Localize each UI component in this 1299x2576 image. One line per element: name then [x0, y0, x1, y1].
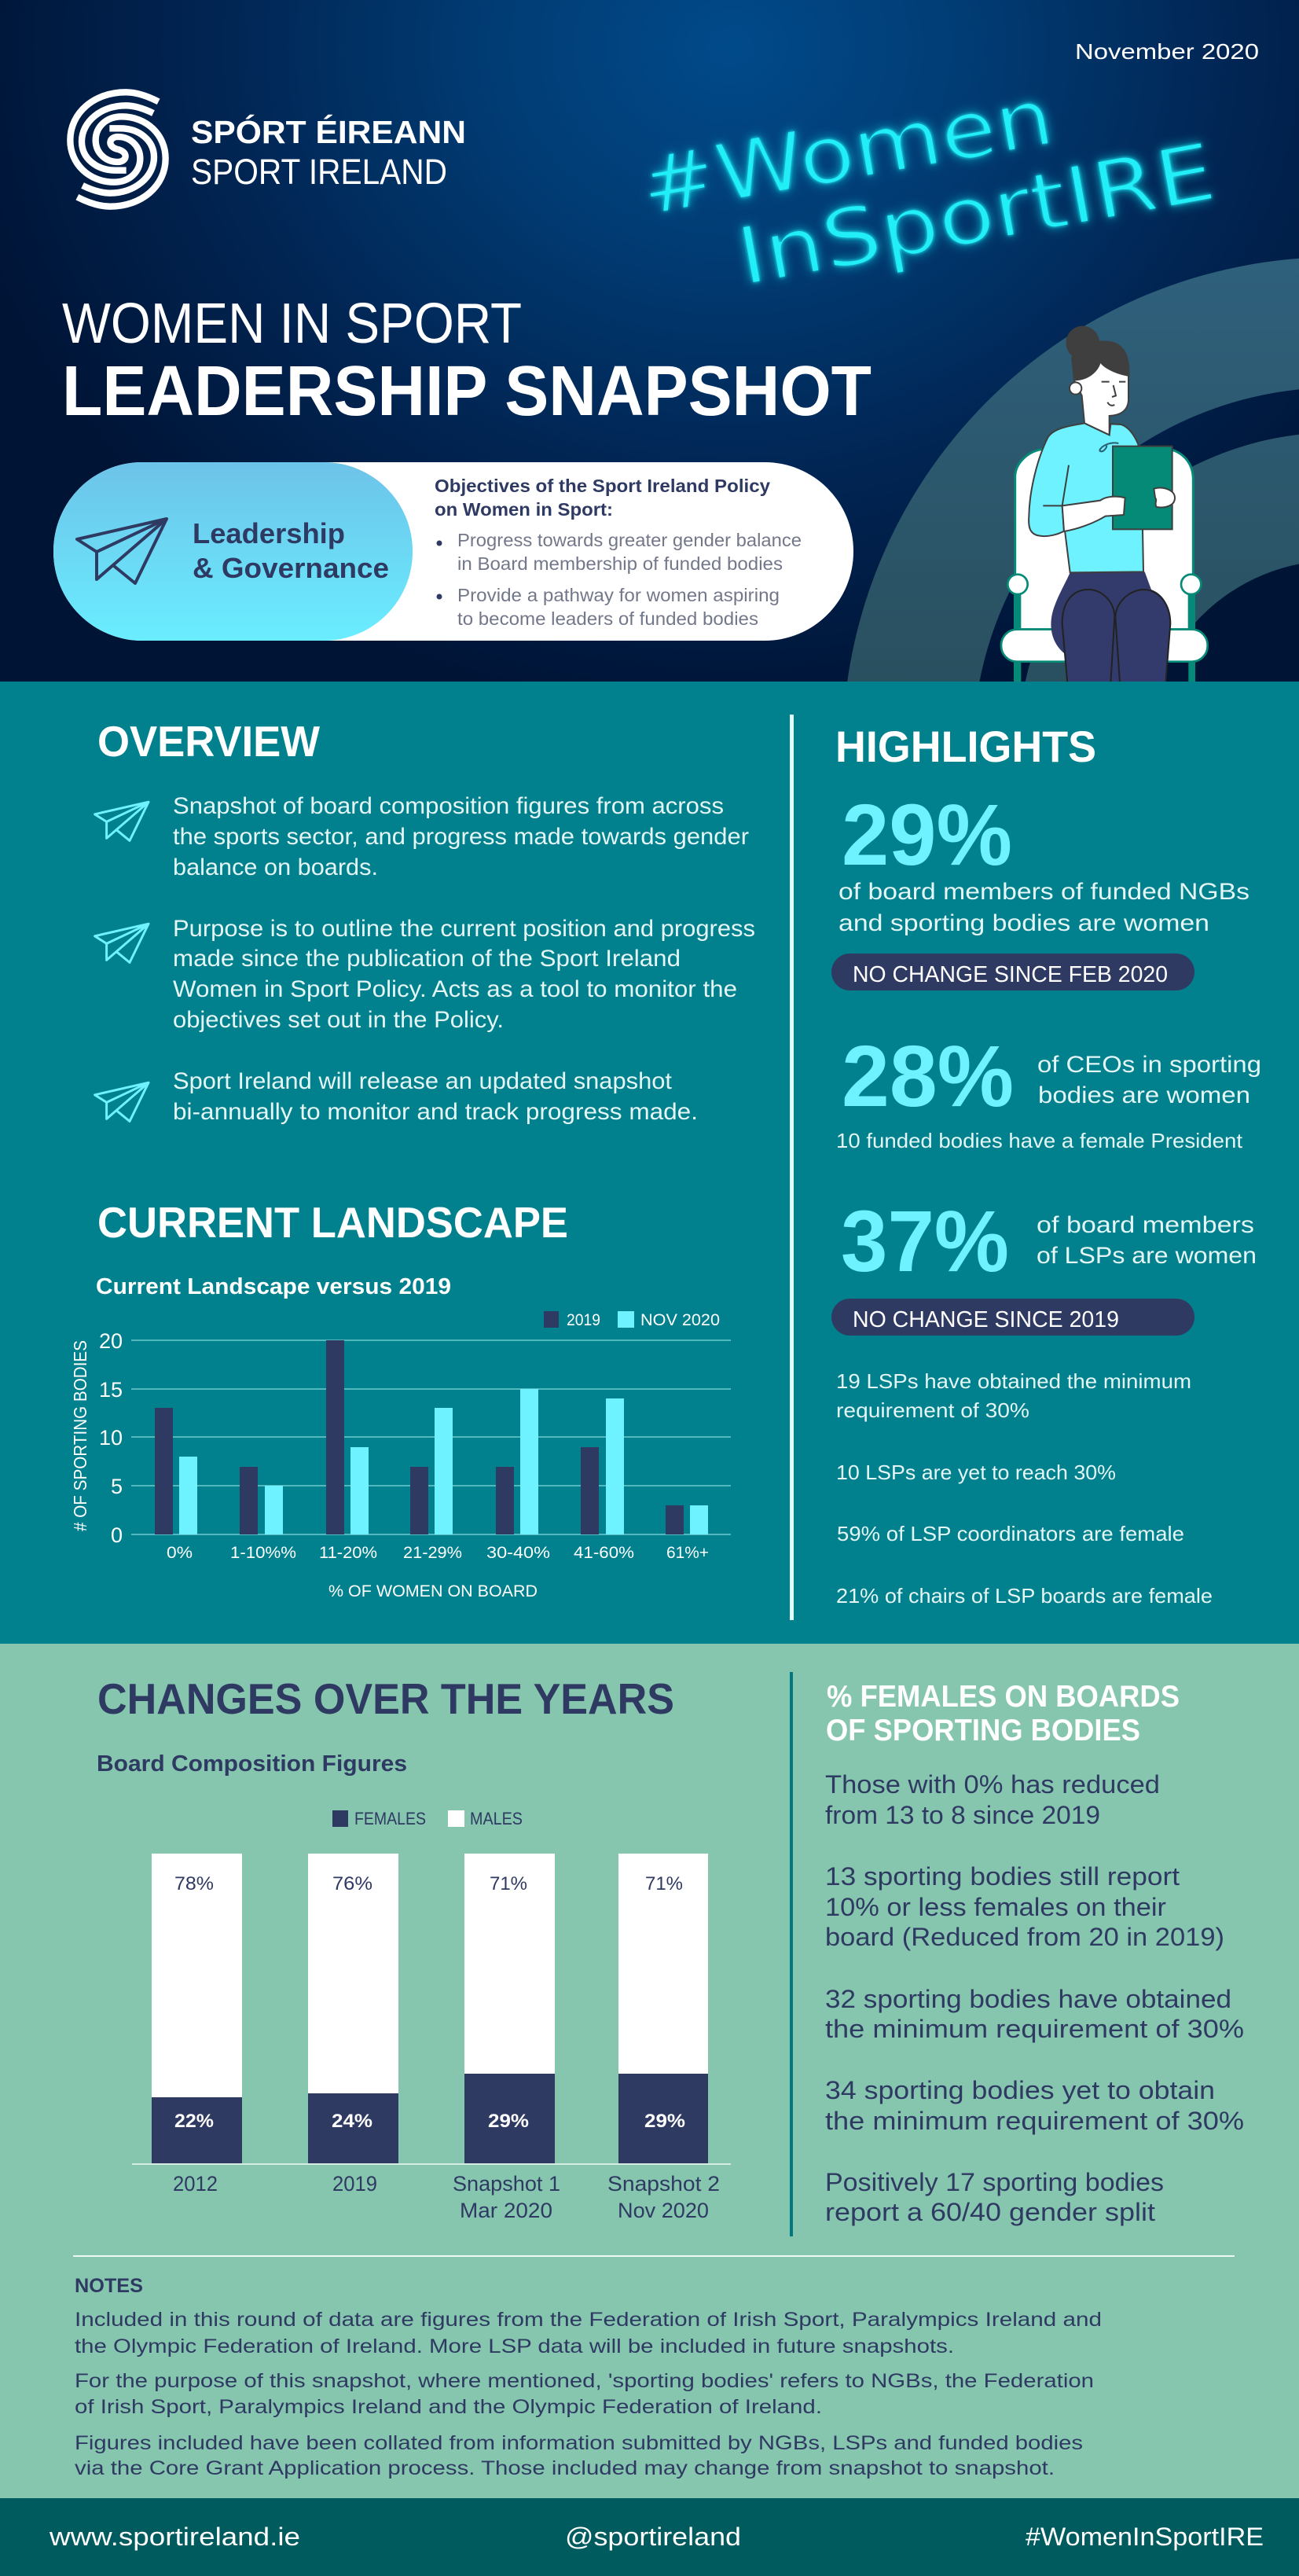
- objectives text: to become leaders of funded bodies: [457, 608, 758, 629]
- logo wordmark: SPÓRT ÉIREANN: [191, 114, 466, 150]
- icon: Sport Ireland logo: [70, 92, 166, 207]
- y axis labels: 20: [99, 1329, 123, 1353]
- y axis title: # OF SPORTING BODIES: [70, 1340, 90, 1531]
- bars 2019: [155, 1340, 684, 1534]
- text: board facts: board (Reduced from 20 in 2019): [825, 1923, 1224, 1951]
- logo wordmark: [191, 114, 466, 192]
- legend: 2019: [567, 1311, 600, 1329]
- heading: % females on boards: OF SPORTING BODIES: [826, 1714, 1140, 1747]
- notes: NOTES: [75, 2275, 143, 2297]
- overview item 3: [95, 1068, 698, 1125]
- LSP facts: 59% of LSP coordinators are female: [837, 1522, 1184, 1545]
- panel: leadership and governance pill: [53, 462, 853, 641]
- overview item 2: [95, 916, 755, 1033]
- notes: the Olympic Federation of Ireland. More LSP data will be included in future snapshots.: [75, 2335, 954, 2357]
- notes: of Irish Sport, Paralympics Ireland and the Olympic Federation of Ireland.: [75, 2396, 822, 2418]
- bar 2012: [152, 1854, 242, 2163]
- bar snapshot 1: 29%: [488, 2111, 529, 2132]
- highlight: 37%: of board members: [1037, 1212, 1254, 1238]
- x axis labels: 1-10%%: [230, 1544, 296, 1562]
- bar chart: current landscape: [70, 1311, 731, 1600]
- x axis labels: [173, 2172, 720, 2222]
- logo wordmark: SPORT IRELAND: [191, 152, 447, 192]
- y axis labels: [99, 1329, 123, 1547]
- text: snapshot: [173, 793, 749, 880]
- text: purpose: Women in Sport Policy. Acts as a tool to monitor the: [173, 976, 737, 1002]
- x axis labels: [167, 1544, 709, 1562]
- objectives text: Provide a pathway for women aspiring: [457, 585, 780, 605]
- text: board facts: Positively 17 sporting bodies: [825, 2168, 1164, 2196]
- LSP facts: 19 LSPs have obtained the minimum: [836, 1369, 1191, 1393]
- LSP facts: 10 LSPs are yet to reach 30%: [836, 1461, 1116, 1484]
- x axis labels: 41-60%: [574, 1544, 634, 1562]
- text: snapshot: Snapshot of board composition figures from across: [173, 793, 724, 819]
- icon: plane 3: [95, 1082, 149, 1121]
- y axis labels: 5: [111, 1475, 123, 1498]
- highlight: 37%: [831, 1193, 1257, 1336]
- chart title: Board Composition Figures: [97, 1751, 407, 1777]
- highlight: 29%: of board members of funded NGBs: [838, 879, 1249, 905]
- highlight: 29%: [831, 787, 1249, 990]
- decorative arcs: [847, 258, 1299, 682]
- label: leadership and governance: & Governance: [193, 552, 389, 584]
- LSP facts: 21% of chairs of LSP boards are female: [836, 1584, 1213, 1608]
- y axis labels: 15: [99, 1378, 123, 1402]
- panel: header: [0, 0, 1299, 682]
- text: board facts: 10% or less females on their: [825, 1893, 1166, 1921]
- LSP facts: requirement of 30%: [836, 1398, 1029, 1422]
- heading: % females on boards: [826, 1680, 1180, 1747]
- panel: teal section: [0, 682, 1299, 1644]
- x axis labels: 30-40%: [486, 1544, 550, 1562]
- neon hashtag: InSportIRE: [730, 126, 1222, 305]
- x axis labels: Snapshot 1: [453, 2172, 560, 2196]
- legend: NOV 2020: [640, 1311, 720, 1329]
- x axis title: % OF WOMEN ON BOARD: [328, 1582, 538, 1600]
- x axis labels: 61%+: [666, 1544, 709, 1562]
- heading: changes over the years: CHANGES OVER THE YEARS: [97, 1674, 674, 1723]
- text: board facts: 34 sporting bodies yet to obtain: [825, 2076, 1215, 2104]
- heading: highlights: HIGHLIGHTS: [835, 722, 1096, 771]
- icon: paper plane: [77, 519, 167, 583]
- text: board facts: from 13 to 8 since 2019: [825, 1801, 1100, 1829]
- text: release: Sport Ireland will release an updated snapshot: [173, 1068, 673, 1094]
- text: board facts: [825, 1770, 1244, 2226]
- badge: no change since feb 2020: NO CHANGE SINCE FEB 2020: [853, 962, 1168, 987]
- bar 2019: [308, 1854, 398, 2163]
- date: November 2020: [1075, 39, 1259, 64]
- notes: [75, 2275, 1102, 2479]
- text: snapshot: the sports sector, and progress made towards gender: [173, 824, 749, 850]
- heading: % females on boards: % FEMALES ON BOARDS: [827, 1680, 1180, 1714]
- highlight: 37%: 37%: [841, 1193, 1009, 1290]
- text: purpose: objectives set out in the Policy.: [173, 1007, 504, 1033]
- bar snapshot 1: [464, 1854, 555, 2163]
- objectives text: on Women in Sport:: [435, 499, 613, 520]
- panel: footer: [0, 2498, 1299, 2576]
- panel: footer: www.sportireland.ie: [49, 2523, 300, 2551]
- x axis labels: 2019: [332, 2172, 377, 2196]
- y axis labels: 10: [99, 1426, 123, 1450]
- label: leadership and governance: Leadership: [193, 517, 345, 549]
- highlight: 28%: bodies are women: [1038, 1082, 1250, 1108]
- x axis labels: 11-20%: [319, 1544, 377, 1562]
- LSP facts: [836, 1369, 1213, 1608]
- text: board facts: the minimum requirement of 30%: [825, 2015, 1244, 2043]
- legend: FEMALES: [354, 1809, 426, 1828]
- text: board facts: the minimum requirement of 30%: [825, 2107, 1244, 2135]
- panel: mint section: [0, 1644, 1299, 2498]
- notes: Figures included have been collated from information submitted by NGBs, LSPs and funded bodies: [75, 2432, 1083, 2454]
- bar snapshot 1: 71%: [490, 1873, 527, 1894]
- x axis labels: Nov 2020: [618, 2199, 709, 2222]
- bar 2019: 24%: [332, 2111, 372, 2132]
- text: purpose: Purpose is to outline the current position and progress: [173, 916, 755, 942]
- bar snapshot 2: [618, 1854, 708, 2163]
- panel: footer: @sportireland: [565, 2523, 741, 2551]
- bars nov 2020: [179, 1389, 708, 1534]
- highlight: 28%: 28%: [842, 1028, 1014, 1125]
- legend: MALES: [470, 1809, 523, 1828]
- badge: no change since feb 2020: [831, 954, 1194, 990]
- text: board facts: Those with 0% has reduced: [825, 1770, 1160, 1799]
- text: purpose: [173, 916, 755, 1033]
- neon hashtag: #Women: [633, 70, 1060, 235]
- bar 2012: 22%: [174, 2111, 214, 2132]
- x axis labels: Snapshot 2: [607, 2172, 720, 2196]
- highlight: 28%: [836, 1028, 1261, 1152]
- notes: For the purpose of this snapshot, where mentioned, 'sporting bodies' refers to NGBs, the Federation: [75, 2370, 1094, 2392]
- objectives text: in Board membership of funded bodies: [457, 553, 783, 574]
- bar 2019: 76%: [332, 1873, 372, 1894]
- highlight: 37%: of LSPs are women: [1037, 1243, 1257, 1269]
- x axis labels: 21-29%: [403, 1544, 462, 1562]
- text: snapshot: balance on boards.: [173, 854, 378, 880]
- legend: [332, 1809, 523, 1828]
- text: board facts: report a 60/40 gender split: [825, 2198, 1155, 2226]
- text: release: [173, 1068, 698, 1125]
- highlight: 29%: and sporting bodies are women: [838, 910, 1209, 936]
- icon: plane 2: [95, 924, 149, 962]
- notes: Included in this round of data are figures from the Federation of Irish Sport, Paralympics Ireland and: [75, 2309, 1102, 2331]
- bar snapshot 2: 71%: [645, 1873, 683, 1894]
- text: board facts: 32 sporting bodies have obtained: [825, 1985, 1231, 2013]
- overview item 1: [95, 793, 749, 880]
- highlight: 28%: 10 funded bodies have a female President: [836, 1129, 1243, 1152]
- text: purpose: made since the publication of the Sport Ireland: [173, 946, 681, 972]
- stacked bar chart: board composition: [132, 1809, 731, 2222]
- title: LEADERSHIP SNAPSHOT: [62, 352, 872, 431]
- panel: footer: #WomenInSportIRE: [1026, 2523, 1264, 2551]
- title: WOMEN IN SPORT: [62, 292, 522, 355]
- objectives text: Progress towards greater gender balance: [457, 530, 802, 550]
- neon hashtag: [633, 70, 1222, 305]
- objectives text: Objectives of the Sport Ireland Policy: [435, 476, 770, 496]
- notes: via the Core Grant Application process. Those included may change from snapshot to snapshot.: [75, 2457, 1055, 2479]
- objectives text: [435, 476, 802, 629]
- label: leadership and governance: [193, 517, 389, 584]
- text: board facts: 13 sporting bodies still report: [825, 1862, 1180, 1891]
- badge: no change since 2019: NO CHANGE SINCE 2019: [853, 1307, 1119, 1332]
- x axis labels: Mar 2020: [460, 2199, 552, 2222]
- icon: plane 1: [95, 802, 149, 840]
- text: release: bi-annually to monitor and track progress made.: [173, 1099, 698, 1125]
- highlight: 28%: of CEOs in sporting: [1037, 1052, 1261, 1078]
- bar snapshot 2: 29%: [644, 2111, 685, 2132]
- legend: [544, 1311, 720, 1329]
- heading: current landscape: CURRENT LANDSCAPE: [97, 1198, 568, 1247]
- illustration: seated woman with clipboard: [1001, 326, 1208, 684]
- x axis labels: 0%: [167, 1544, 193, 1562]
- bar 2012: 78%: [174, 1873, 214, 1894]
- badge: no change since 2019: [831, 1299, 1194, 1336]
- heading: overview: OVERVIEW: [97, 717, 320, 766]
- x axis labels: 2012: [173, 2172, 218, 2196]
- y axis labels: 0: [111, 1523, 123, 1547]
- highlight: 29%: 29%: [842, 787, 1012, 884]
- title: [62, 292, 872, 431]
- chart title: Current Landscape versus 2019: [96, 1274, 451, 1299]
